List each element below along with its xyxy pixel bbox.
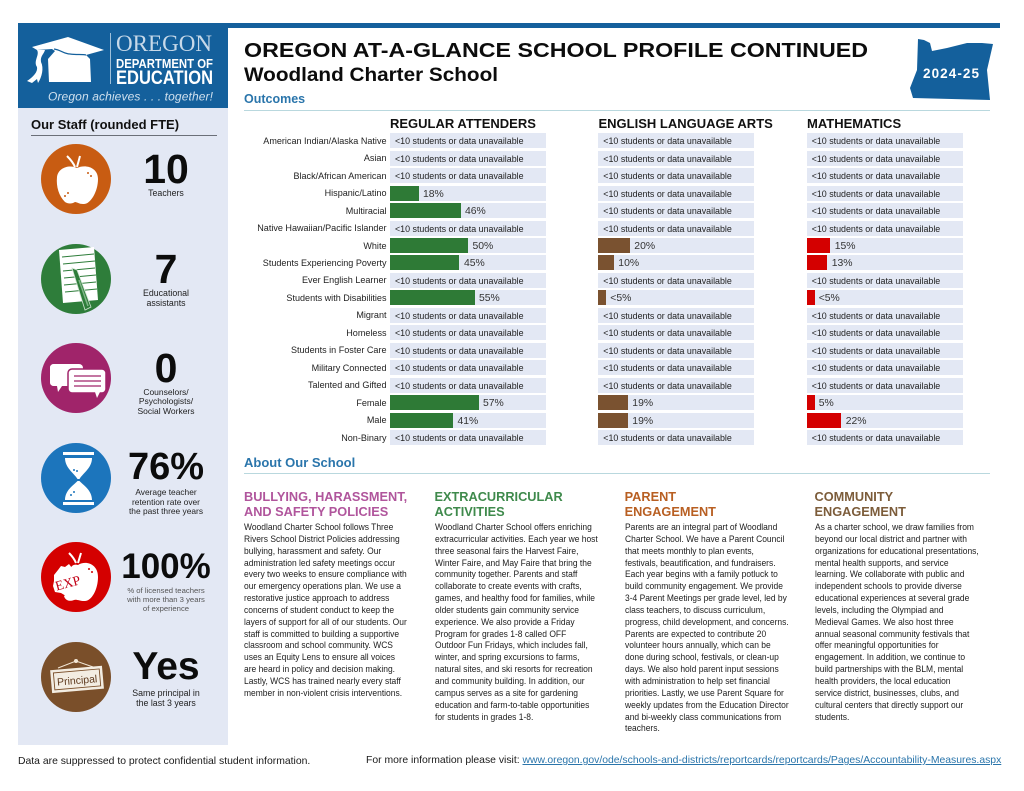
stat: teachers [41, 144, 189, 214]
value: 10: 10 [143, 146, 189, 192]
caption: Teachers: Teachers [148, 188, 184, 198]
student group labels: Students with Disabilities [286, 293, 386, 303]
text block: extracurricular [434, 488, 598, 722]
bar chart: regular attenders: 18% [423, 189, 444, 200]
body: extracurricular: extracurricular activities. Each year we host [434, 534, 597, 544]
body: community engagement: As a charter school, we draw families from [814, 522, 973, 532]
student group labels: White [363, 240, 386, 250]
bar chart: english language arts: <10 students or data unavailable [603, 346, 732, 356]
body: community engagement: annual seasonal community festivals that [814, 629, 969, 639]
caption: same principal [132, 688, 200, 708]
text block: bullying policies [244, 488, 407, 698]
bar chart: mathematics: <10 students or data unavailable [812, 224, 940, 234]
body: community engagement: learning. We collaborate with public and [814, 569, 964, 579]
heading: community engagement: COMMUNITY [814, 488, 893, 504]
caption: teacher retention: retention rate over [132, 497, 200, 507]
student group labels: Migrant [356, 310, 386, 320]
body: community engagement: service district, businesses, clubs, and [814, 688, 958, 698]
value: Yes: Yes [132, 645, 200, 688]
bar chart: regular attenders: <10 students or data unavailable [395, 276, 524, 286]
sidebar panel background [18, 108, 228, 745]
stat: licensed teachers experience [41, 542, 211, 613]
sidebar heading: Our Staff: Our Staff (rounded FTE) [31, 117, 179, 132]
bar chart: english language arts: 20% [634, 241, 655, 252]
bar chart: regular attenders: 45% [464, 258, 485, 269]
bar chart: mathematics: <10 students or data unavailable [812, 433, 940, 443]
student group labels: Homeless [346, 328, 386, 338]
icon: apple with EXP bite: EXP [54, 572, 82, 594]
body: community engagement: engagement. In addition, we continue to [814, 652, 965, 662]
caption: teacher retention [129, 487, 203, 516]
bar chart: english language arts [598, 133, 754, 445]
title: OREGON AT-A-GLANCE SCHOOL PROFILE CONTINUED [244, 39, 868, 62]
body: bullying: staff is committed to building a supportive [244, 629, 399, 639]
body: extracurricular: community together. Parents and staff [434, 569, 577, 579]
body: parent engagement: Each year begins with a family potluck to [625, 569, 777, 579]
bar chart: regular attenders: <10 students or data unavailable [395, 363, 524, 373]
student group labels: Male [367, 415, 386, 425]
bar chart: mathematics: <10 students or data unavailable [812, 206, 940, 216]
heading: extracurricular [434, 488, 563, 518]
bar chart: regular attenders: <10 students or data unavailable [395, 328, 524, 338]
body: community engagement: Medieval Games. We also host three [814, 617, 953, 627]
bar chart: english language arts: 10% [618, 258, 639, 269]
heading: bullying [244, 488, 407, 518]
caption: Educational assistants: Educational [143, 288, 189, 298]
bar chart: regular attenders: <10 students or data unavailable [395, 136, 524, 146]
stat: educational assistants [41, 244, 189, 314]
text block: parent engagement [625, 488, 789, 733]
bar chart: english language arts: <10 students or data unavailable [603, 206, 732, 216]
body: extracurricular: Woodland Charter School offers enriching [434, 522, 591, 532]
heading: community engagement: ENGAGEMENT [814, 504, 906, 518]
bar chart: mathematics: <10 students or data unavailable [812, 328, 940, 338]
body: parent engagement: 3-4 Parent Meetings per grade level, led by [625, 593, 786, 603]
bar chart: english language arts: 19% [632, 416, 653, 427]
bar chart: mathematics: <10 students or data unavailable [812, 311, 940, 321]
badge: Oregon state shape with year [910, 39, 993, 100]
body: bullying [244, 522, 407, 698]
caption: Counselors/Psychologists/Social Workers [138, 386, 194, 416]
body: parent engagement: Parents are expected to contribute 20 [625, 629, 766, 639]
student group labels: Non-Binary [341, 433, 386, 443]
bar chart: english language arts: <10 students or data unavailable [603, 311, 732, 321]
bar chart: regular attenders [390, 133, 546, 445]
value: 7: 7 [155, 246, 177, 292]
bar chart: regular attenders: <10 students or data unavailable [395, 433, 524, 443]
icon: apple [41, 144, 111, 214]
heading: Mathematics: MATHEMATICS [807, 116, 901, 131]
body: extracurricular: games, and healthy food for families, while [434, 593, 594, 603]
body: parent engagement: volunteer hours annually, which can be [625, 640, 770, 650]
body: community engagement: students. [814, 712, 849, 722]
bar chart: regular attenders: <10 students or data unavailable [395, 346, 524, 356]
bar chart: regular attenders: <10 students or data unavailable [395, 224, 524, 234]
body: extracurricular: winter, and spring excursions to farms, [434, 652, 579, 662]
body: parent engagement: Charter School. We have a Parent Council [625, 534, 784, 544]
body: community engagement: mental health supports, and service [814, 558, 948, 568]
section heading: About Our School: About Our School [244, 455, 355, 470]
value: 0: 0 [155, 345, 177, 391]
student group labels: Talented and Gifted [308, 380, 386, 390]
caption: Educational assistants: assistants [146, 298, 186, 308]
bar chart: regular attenders: <10 students or data unavailable [395, 171, 524, 181]
body: extracurricular: experience. We also provide a Friday [434, 617, 574, 627]
student group labels: Asian [364, 153, 386, 163]
bar chart: mathematics: <10 students or data unavailable [812, 363, 940, 373]
body: bullying: layers of support for all of our students. Our [244, 617, 407, 627]
body: community engagement: independent schools to provide diverse [814, 581, 961, 591]
student group labels: Female [356, 398, 386, 408]
caption: Educational assistants [143, 288, 189, 308]
logo: Oregon Department of Education: EDUCATION [116, 67, 213, 89]
heading: extracurricular: ACTIVITIES [434, 504, 505, 518]
body: bullying: Rivers School District Policies addressing [244, 534, 400, 544]
student group labels: Native Hawaiian/Pacific Islander [257, 223, 386, 233]
body: bullying: concerns of student conduct to keep the [244, 605, 394, 615]
caption: same principal: Same principal in [132, 688, 200, 698]
student group labels: Hispanic/Latino [325, 188, 386, 198]
bar chart: mathematics: 13% [832, 258, 852, 269]
body: extracurricular: collaborate to create events with crafts, [434, 581, 581, 591]
bar chart: mathematics: <10 students or data unavailable [812, 276, 940, 286]
caption: licensed teachers [127, 586, 205, 613]
student group labels: Ever English Learner [302, 275, 386, 285]
body: bullying: administration led safety meetings occur [244, 558, 395, 568]
bar chart: mathematics: <10 students or data unavailable [812, 189, 940, 199]
body: parent engagement [625, 522, 789, 733]
bar chart: mathematics: 15% [835, 241, 855, 252]
heading: bullying: BULLYING, HARASSMENT, [244, 488, 407, 504]
body: parent engagement: build community engagement. We provide [625, 581, 783, 591]
caption: Counselors/Psychologists/Social Workers: Counselors/ [143, 386, 189, 396]
body: parent engagement: that meets monthly to plan events, [625, 546, 754, 556]
bar chart: english language arts: <10 students or data unavailable [603, 276, 732, 286]
body: bullying: classroom and school community. WCS [244, 640, 393, 650]
body: parent engagement: progress, child development, and concerns. [625, 617, 788, 627]
caption: teacher retention: the past three years [129, 506, 203, 516]
footer: more information link: For more information please visit: www.oregon.gov/ode/schools-and-districts/reportcards/reportcards/Pages/Accountability-Measures.aspx [366, 755, 1001, 766]
body: community engagement: cultural centers that directly support our [814, 700, 963, 710]
body: bullying: bullying, harassment and safety. Our [244, 546, 381, 556]
body: extracurricular: Program for grades 1-8 called OFF [434, 629, 566, 639]
body: parent engagement: class teachers, to discuss curriculum, [625, 605, 765, 615]
bar chart: english language arts: <5% [610, 293, 631, 304]
body: extracurricular: older students gain community service [434, 605, 578, 615]
body: community engagement: offer meaningful opportunities for [814, 640, 938, 650]
body: bullying: every two weeks to ensure compliance with [244, 569, 407, 579]
title [244, 39, 868, 86]
body: parent engagement: Parents are an integral part of Woodland [625, 522, 777, 532]
title: Woodland Charter School [244, 64, 498, 86]
icon: hourglass [41, 443, 111, 513]
bar chart: english language arts: <10 students or data unavailable [603, 171, 732, 181]
stat: teacher retention [41, 443, 204, 516]
icon: principal sign [41, 642, 111, 712]
body: extracurricular [434, 522, 598, 722]
caption: same principal: the last 3 years [136, 698, 196, 708]
body: parent engagement: teachers. [625, 723, 659, 733]
bar chart: mathematics: <10 students or data unavailable [812, 154, 940, 164]
bar chart: regular attenders: 57% [483, 398, 504, 409]
body: parent engagement: with administration to help set financial [625, 676, 770, 686]
body: extracurricular: Outdoor Fun Fridays, which includes fall, [434, 640, 587, 650]
value: 100%: 100% [121, 547, 211, 586]
bar chart: mathematics: 5% [819, 398, 834, 409]
logo: Oregon Department of Education: Oregon achieves . . . together! [48, 90, 214, 104]
bar chart: regular attenders: 41% [458, 416, 478, 427]
bar chart: regular attenders: <10 students or data unavailable [395, 154, 524, 164]
student group labels: Students in Foster Care [291, 345, 386, 355]
body: parent engagement: weekly updates from the Education Director [625, 700, 788, 710]
body: community engagement: health providers, the local education [814, 676, 950, 686]
bar chart: mathematics: 22% [846, 416, 866, 427]
body: bullying: Lastly, WCS has trained nearly every staff [244, 676, 401, 686]
heading: parent engagement: PARENT [625, 488, 676, 504]
bar chart: mathematics: <10 students or data unavailable [812, 136, 940, 146]
student group labels [257, 136, 386, 443]
icon: principal sign: Principal [57, 673, 98, 689]
body: bullying: uses an Equity Lens to ensure all voices [244, 652, 395, 662]
student group labels: American Indian/Alaska Native [263, 136, 386, 146]
body: community engagement: organizations for educational presentations, [814, 546, 978, 556]
body: community engagement [814, 522, 978, 722]
student group labels: Black/African American [293, 171, 386, 181]
heading: community engagement [814, 488, 906, 518]
bar chart: english language arts: <10 students or data unavailable [603, 381, 732, 391]
heading: parent engagement [625, 488, 716, 518]
heading: bullying: AND SAFETY POLICIES [244, 504, 388, 518]
bar chart: english language arts: <10 students or data unavailable [603, 189, 732, 199]
body: bullying: our emergency operations plan. We use a [244, 581, 401, 591]
stat: same principal [41, 642, 200, 712]
icon: paper and pencil [41, 244, 111, 314]
badge: Oregon state shape with year: 2024-25 [923, 66, 979, 81]
top header bar [228, 23, 1000, 28]
bar chart: regular attenders: 55% [479, 293, 500, 304]
value: 76%: 76% [128, 446, 204, 488]
stat: counselors [41, 343, 194, 416]
icon: apple with EXP bite [41, 542, 111, 612]
bar chart: mathematics: <10 students or data unavailable [812, 171, 940, 181]
body: parent engagement: and bi-weekly class communications from [625, 712, 781, 722]
caption: Counselors/Psychologists/Social Workers: Social Workers [138, 406, 194, 416]
body: extracurricular: education and farm-to-table opportunities [434, 700, 589, 710]
bar chart: regular attenders: 50% [472, 241, 493, 252]
body: extracurricular: campus serves as a site for gardening [434, 688, 578, 698]
bar chart: english language arts: <10 students or data unavailable [603, 154, 732, 164]
caption: licensed teachers: with more than 3 years [127, 595, 205, 604]
bar chart: english language arts: <10 students or data unavailable [603, 433, 732, 443]
body: community engagement: beyond our local district and partner with [814, 534, 966, 544]
caption: Counselors/Psychologists/Social Workers: Psychologists/ [139, 396, 193, 406]
footer: suppression note: Data are suppressed to protect confidential student information. [18, 756, 310, 767]
logo: Oregon Department of Education: OREGON [116, 31, 212, 56]
bar chart: english language arts: <10 students or data unavailable [603, 136, 732, 146]
body: extracurricular: natural sites, and ski resorts for recreation [434, 664, 592, 674]
icon: speech bubbles [41, 343, 111, 413]
body: community engagement: levels, including the Olympiad and [814, 605, 943, 615]
bar chart: mathematics: <10 students or data unavailable [812, 381, 940, 391]
caption: licensed teachers: % of licensed teachers [127, 586, 205, 595]
section heading: Outcomes: Outcomes [244, 92, 305, 106]
body: extracurricular: Winter Faire, and May Faire that bring the [434, 558, 591, 568]
body: parent engagement: priorities. Lastly, we use Parent Square for [625, 688, 783, 698]
bar chart: mathematics: <10 students or data unavailable [812, 346, 940, 356]
bar chart: mathematics [807, 133, 963, 445]
bar chart: regular attenders: 46% [465, 206, 486, 217]
body: extracurricular: for students in grades 1-8. [434, 712, 533, 722]
student group labels: Multiracial [346, 206, 386, 216]
text block: community engagement [814, 488, 978, 722]
body: bullying: member in non-violent crisis interventions. [244, 688, 402, 698]
body: community engagement: educational experiences at several grade [814, 593, 969, 603]
heading: parent engagement: ENGAGEMENT [625, 504, 716, 518]
body: parent engagement: festivals, beautification, and fundraisers. [625, 558, 775, 568]
bar chart: regular attenders: <10 students or data unavailable [395, 311, 524, 321]
logo: Oregon Department of Education [18, 23, 228, 108]
body: community engagement: build partnerships with the BLM, mental [814, 664, 963, 674]
heading: extracurricular: EXTRACURRICULAR [434, 488, 563, 504]
bar chart: mathematics: <5% [819, 293, 840, 304]
body: bullying: Woodland Charter School follows Three [244, 522, 393, 532]
body: extracurricular: three seasonal fairs the Harvest Faire, [434, 546, 578, 556]
body: extracurricular: and community building. In addition, our [434, 676, 584, 686]
heading: Regular Attenders: REGULAR ATTENDERS [390, 116, 536, 131]
caption: licensed teachers: of experience [143, 604, 189, 613]
body: bullying: restorative justice approach to address [244, 593, 389, 603]
heading: English Language Arts: ENGLISH LANGUAGE ARTS [598, 116, 773, 131]
student group labels: Military Connected [312, 363, 386, 373]
body: bullying: are heard in policy and decision making. [244, 664, 395, 674]
caption: teacher retention: Average teacher [135, 487, 197, 497]
bar chart: english language arts: <10 students or data unavailable [603, 224, 732, 234]
bar chart: english language arts: 19% [632, 398, 653, 409]
student group labels: Students Experiencing Poverty [263, 258, 386, 268]
bar chart: english language arts: <10 students or data unavailable [603, 363, 732, 373]
bar chart: regular attenders: <10 students or data unavailable [395, 381, 524, 391]
body: parent engagement: days. We also hold parent input sessions [625, 664, 778, 674]
logo: Oregon Department of Education: DEPARTMENT OF [116, 57, 213, 71]
bar chart: english language arts: <10 students or data unavailable [603, 328, 732, 338]
body: parent engagement: done during school, festivals, or clean-up [625, 652, 778, 662]
